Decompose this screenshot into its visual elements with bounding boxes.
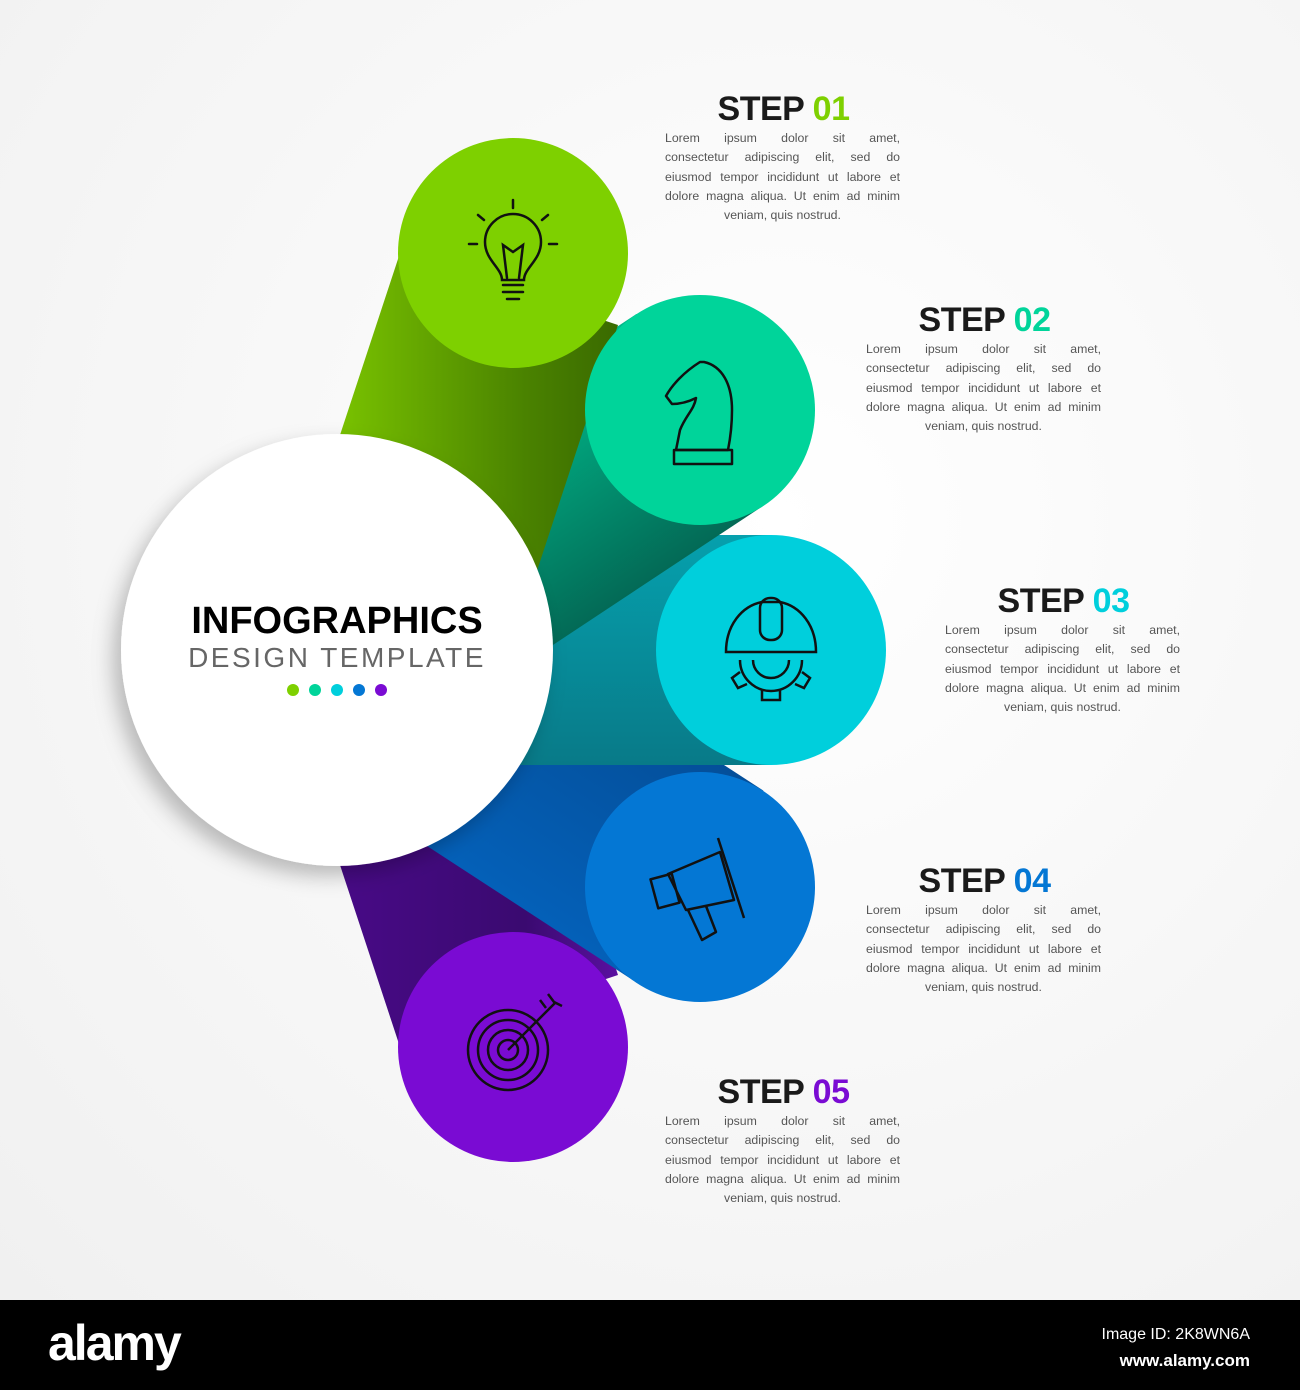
circle step 1 xyxy=(398,138,628,368)
step 01 text: Lorem ipsum dolor sit amet, xyxy=(665,131,900,145)
circle step 5 xyxy=(398,932,628,1162)
step 03 text: consectetur adipiscing elit, sed do xyxy=(945,642,1180,656)
step 02 text: Lorem ipsum dolor sit amet, xyxy=(866,342,1101,356)
step 05 text xyxy=(665,1073,900,1205)
step 02 text: dolore magna aliqua. Ut enim ad minim xyxy=(866,400,1101,414)
step 05 text: eiusmod tempor incididunt ut labore et xyxy=(665,1153,900,1167)
step 04 text: Lorem ipsum dolor sit amet, xyxy=(866,903,1101,917)
step 03 text: veniam, quis nostrud. xyxy=(1004,700,1121,714)
step 03 text: dolore magna aliqua. Ut enim ad minim xyxy=(945,681,1180,695)
step 05 text: dolore magna aliqua. Ut enim ad minim xyxy=(665,1172,900,1186)
step 03 text: STEP 03 xyxy=(998,582,1129,620)
icon: target with arrow xyxy=(468,994,562,1090)
step 02 text: STEP 02 xyxy=(919,301,1050,339)
center title: INFOGRAPHICS xyxy=(191,600,483,642)
step 01 text: veniam, quis nostrud. xyxy=(724,208,841,222)
step 05 text: veniam, quis nostrud. xyxy=(724,1191,841,1205)
step 05 text: consectetur adipiscing elit, sed do xyxy=(665,1133,900,1147)
center title xyxy=(188,600,486,696)
icon: light bulb xyxy=(469,200,557,299)
icon: megaphone xyxy=(650,838,744,940)
footer bar: www.alamy.com xyxy=(1120,1351,1250,1370)
footer bar: alamy xyxy=(48,1315,180,1371)
step 03 text xyxy=(945,582,1180,714)
center circle xyxy=(121,434,553,866)
step 05 text: STEP 05 xyxy=(718,1073,849,1111)
icon: chess knight xyxy=(666,362,732,464)
center title: DESIGN TEMPLATE xyxy=(188,642,486,673)
step 04 text xyxy=(866,862,1101,994)
icon: hard hat with gear xyxy=(726,598,816,700)
color dots xyxy=(287,684,387,696)
footer bar: Image ID: 2K8WN6A xyxy=(1102,1326,1250,1343)
step 04 text: dolore magna aliqua. Ut enim ad minim xyxy=(866,961,1101,975)
circle step 4 xyxy=(585,772,815,1002)
step 03 text: Lorem ipsum dolor sit amet, xyxy=(945,623,1180,637)
step 01 text: eiusmod tempor incididunt ut labore et xyxy=(665,170,900,184)
step 04 text: veniam, quis nostrud. xyxy=(925,980,1042,994)
step 02 text xyxy=(866,301,1101,433)
footer bar xyxy=(0,1300,1300,1390)
step 03 text: eiusmod tempor incididunt ut labore et xyxy=(945,662,1180,676)
step 02 text: eiusmod tempor incididunt ut labore et xyxy=(866,381,1101,395)
circle step 2 xyxy=(585,295,815,525)
step 01 text: STEP 01 xyxy=(718,90,849,128)
step 05 text: Lorem ipsum dolor sit amet, xyxy=(665,1114,900,1128)
circle step 3 xyxy=(656,535,886,765)
step 01 text: consectetur adipiscing elit, sed do xyxy=(665,150,900,164)
step 04 text: consectetur adipiscing elit, sed do xyxy=(866,922,1101,936)
step 02 text: consectetur adipiscing elit, sed do xyxy=(866,361,1101,375)
step 02 text: veniam, quis nostrud. xyxy=(925,419,1042,433)
step 04 text: STEP 04 xyxy=(919,862,1050,900)
step 01 text xyxy=(665,90,900,222)
step 04 text: eiusmod tempor incididunt ut labore et xyxy=(866,942,1101,956)
cylinder bands xyxy=(274,253,771,1047)
step 01 text: dolore magna aliqua. Ut enim ad minim xyxy=(665,189,900,203)
